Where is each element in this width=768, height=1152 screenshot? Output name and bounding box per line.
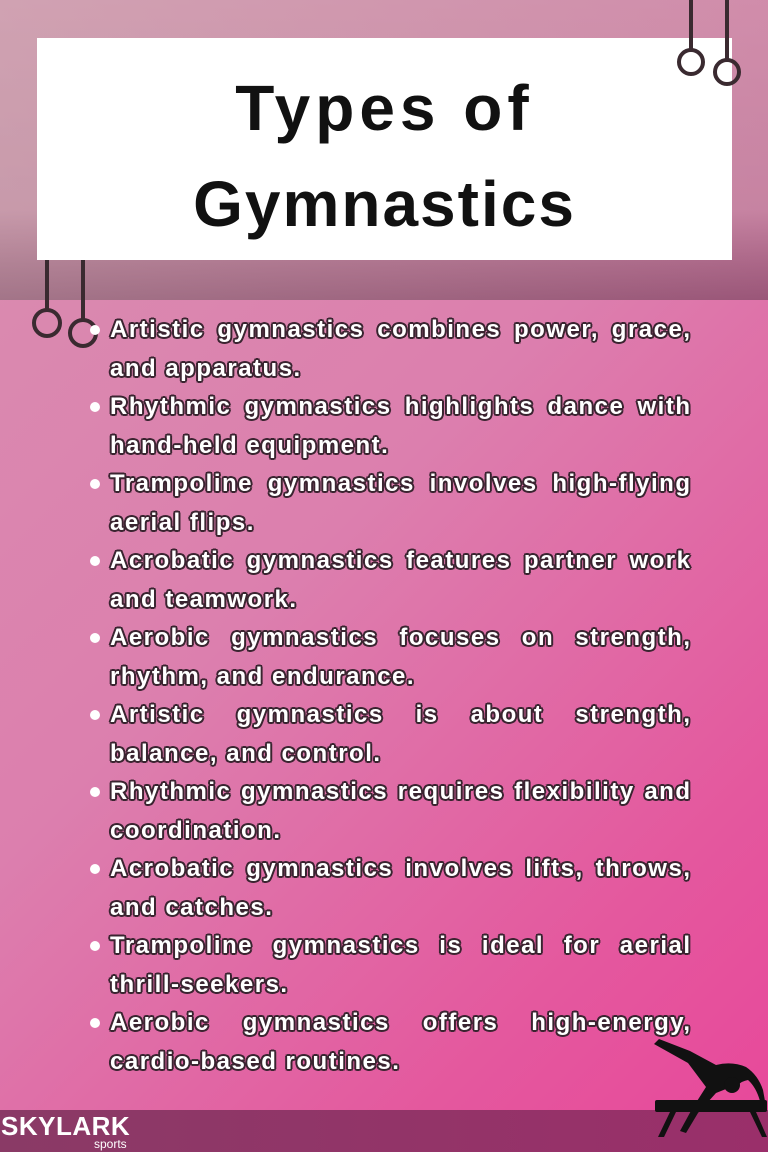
bottom band	[0, 1110, 768, 1152]
bullet list: Acrobatic gymnastics involves lifts, throws,	[110, 855, 692, 882]
logo	[1, 1111, 130, 1151]
text: SKYLARK	[1, 1111, 130, 1141]
bullet list: cardio-based routines.	[110, 1048, 400, 1074]
icon: rings left	[32, 260, 98, 348]
bullet list: Rhythmic gymnastics highlights dance with	[110, 393, 692, 420]
bullet list: aerial flips.	[110, 508, 255, 536]
icon: rings top right	[677, 0, 741, 86]
bullet list: Trampoline gymnastics is ideal for aerial	[110, 932, 692, 959]
title box	[37, 38, 732, 260]
bullet list: Artistic gymnastics is about strength,	[110, 701, 692, 728]
bullet list: rhythm, and endurance.	[110, 662, 415, 690]
bullet list: Artistic gymnastics combines power, grace,	[110, 316, 692, 343]
bullet list: and catches.	[110, 894, 273, 920]
title box: Gymnastics	[193, 168, 576, 240]
title box: Types of	[235, 72, 534, 144]
text: sports	[94, 1137, 127, 1151]
bullet list: Acrobatic gymnastics features partner work	[110, 547, 692, 574]
bullet list: Aerobic gymnastics focuses on strength,	[110, 624, 692, 651]
bullet list: hand-held equipment.	[110, 432, 389, 458]
bullet list: Aerobic gymnastics offers high-energy,	[110, 1009, 692, 1036]
bullet list: balance, and control.	[110, 740, 382, 766]
bullet list: Trampoline gymnastics involves high-flying	[110, 470, 692, 497]
bullet list: Rhythmic gymnastics requires flexibility and	[110, 778, 692, 805]
bullet list: coordination.	[110, 816, 282, 844]
bullet list: and apparatus.	[110, 354, 302, 382]
icon: gymnast on beam	[654, 1039, 767, 1137]
bullet list	[90, 316, 692, 1074]
bullet list: and teamwork.	[110, 586, 298, 612]
bullet list: thrill-seekers.	[110, 970, 289, 998]
